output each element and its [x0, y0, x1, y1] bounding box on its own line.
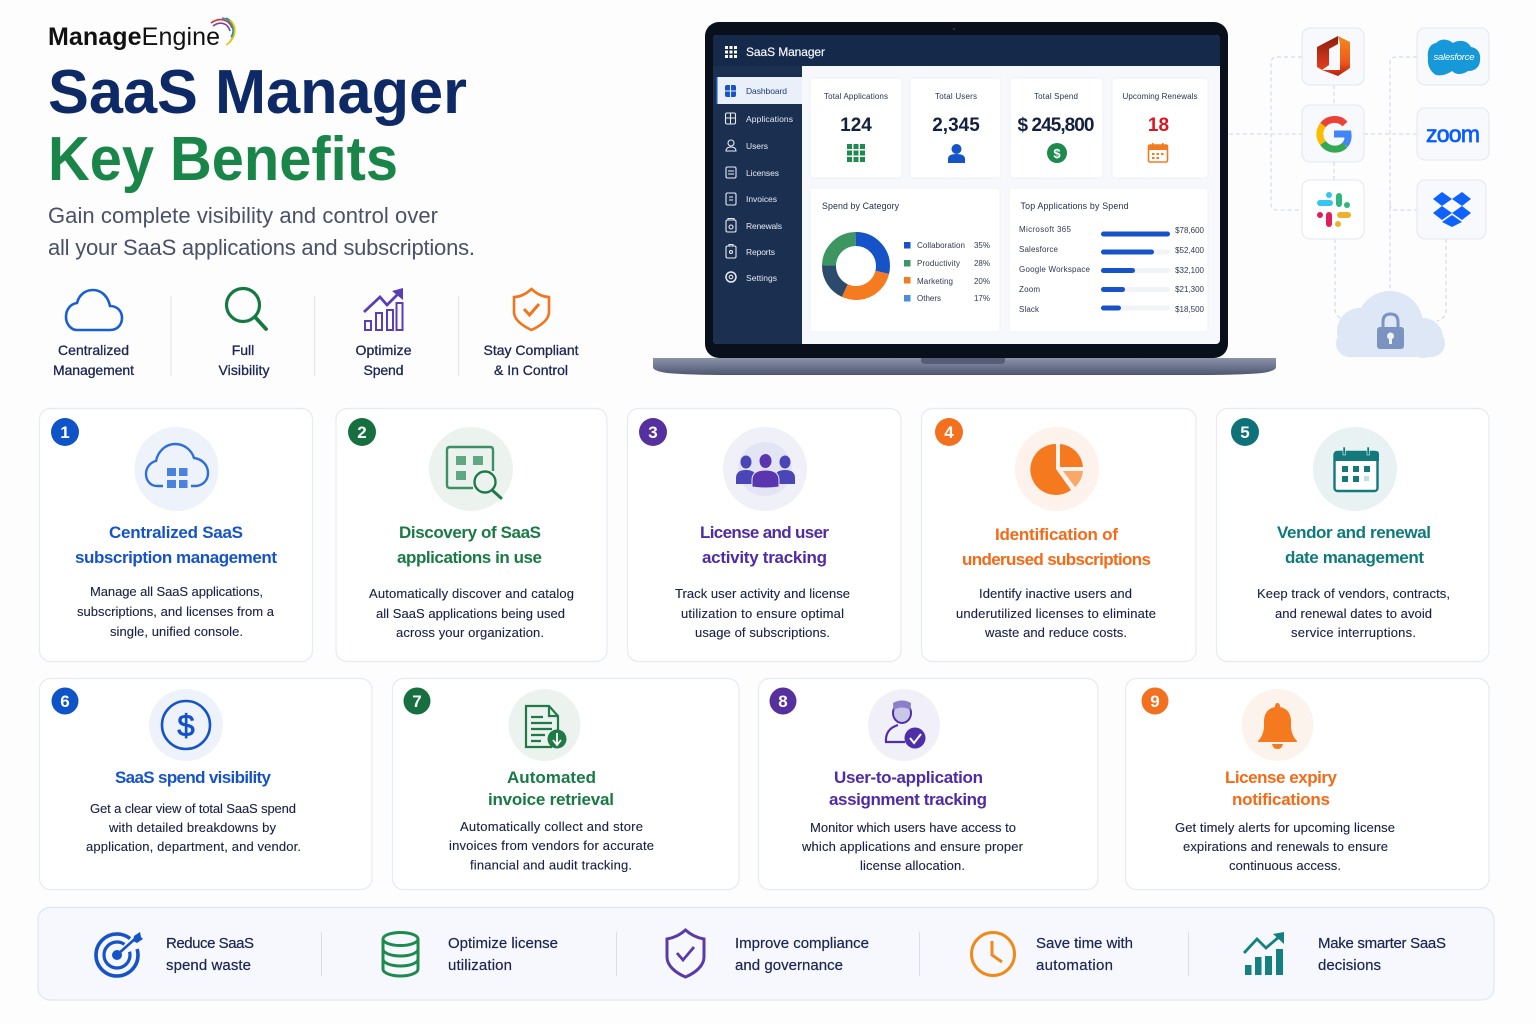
chart: Spend by Category donut: 20%	[974, 277, 990, 286]
KPI: Total Applications: Total Applications	[824, 92, 888, 101]
logo tile: Salesforce	[1417, 28, 1489, 85]
icon: app discovery	[429, 427, 513, 511]
label: Optimize Spend: Optimize	[356, 342, 412, 358]
heading	[397, 523, 542, 567]
heading: invoice retrieval	[488, 790, 614, 809]
sidebar: Applications	[746, 114, 793, 124]
KPI: Total Spend	[1010, 78, 1103, 178]
description	[449, 819, 654, 872]
KPI: Upcoming Renewals: Upcoming Renewals	[1122, 92, 1198, 101]
sidebar: Reports	[746, 247, 775, 257]
panel: card 9 expiry notifications	[1126, 678, 1489, 890]
text: reduce spend waste: Reduce SaaS	[166, 935, 254, 952]
heading	[488, 768, 614, 809]
description	[369, 586, 574, 640]
heading	[1277, 523, 1431, 567]
heading: assignment tracking	[829, 790, 987, 809]
badge 2: 2	[357, 423, 367, 442]
icon: document download	[508, 689, 580, 761]
KPI: Total Spend: Total Spend	[1034, 92, 1078, 101]
logo tile: Zoom	[1417, 108, 1489, 160]
sidebar: Renewals	[746, 221, 782, 231]
chart: Spend by Category donut: Others	[917, 294, 941, 303]
heading	[829, 768, 987, 809]
description: single, unified console.	[110, 624, 243, 639]
label: Optimize Spend: Spend	[364, 362, 404, 378]
KPI: Upcoming Renewals	[1112, 78, 1208, 178]
subtitle: Gain complete visibility and control over	[48, 203, 438, 228]
chart: Top Applications by Spend: $21,300	[1175, 285, 1205, 294]
description	[77, 584, 275, 639]
description	[675, 586, 850, 640]
chart: Spend by Category donut: Spend by Category	[822, 201, 900, 211]
badge 1: 1	[60, 423, 70, 442]
label: Full Visibility: Full	[232, 342, 254, 358]
heading: Discovery of SaaS	[399, 523, 541, 542]
app header: SaaS Manager	[746, 45, 825, 59]
feature row	[53, 288, 579, 378]
text: improve compliance governance: Improve compliance	[735, 935, 869, 952]
description: license allocation.	[860, 858, 965, 873]
logo tile: Google	[1302, 105, 1364, 162]
badge 1	[51, 418, 79, 446]
icon: pie chart	[1015, 427, 1099, 511]
description: invoices from vendors for accurate	[449, 838, 654, 853]
description	[801, 820, 1024, 873]
badge 8	[770, 688, 796, 714]
description: with detailed breakdowns by	[108, 820, 276, 835]
text: save time: automation	[1036, 957, 1113, 974]
text: smarter decisions: Make smarter SaaS	[1318, 935, 1446, 952]
description	[1257, 586, 1450, 640]
KPI: Total Users: Total Users	[935, 92, 977, 101]
icon: bell	[1242, 689, 1314, 761]
description: Monitor which users have access to	[810, 820, 1016, 835]
KPI: Total Users	[910, 78, 1001, 178]
laptop dashboard	[653, 22, 1276, 375]
icon: growth bars	[1244, 932, 1284, 975]
description: Manage all SaaS applications,	[90, 584, 263, 599]
label: Full Visibility: Visibility	[218, 362, 270, 378]
heading: activity tracking	[702, 548, 827, 567]
icon: dollar coin	[149, 689, 223, 761]
KPI: Total Applications: 124	[840, 115, 872, 136]
label: Centralized Management: Management	[53, 362, 134, 378]
icon: growth chart	[364, 288, 403, 330]
badge 3: 3	[648, 423, 658, 442]
sidebar: Invoices	[746, 194, 777, 204]
text: save time	[1036, 935, 1133, 974]
subtitle: all your SaaS applications and subscriptions.	[48, 235, 475, 260]
description: underutilized licenses to eliminate	[956, 606, 1156, 621]
panel: card 3 license tracking	[628, 408, 901, 662]
chart: Top Applications by Spend	[1009, 188, 1208, 332]
heading: User-to-application	[834, 768, 983, 787]
icon: users	[723, 427, 807, 511]
badge 6	[52, 688, 78, 714]
label: Centralized Management	[53, 342, 134, 378]
panel: card 1 centralized subscription management	[40, 408, 312, 662]
heading	[962, 525, 1151, 569]
badge 4	[935, 418, 963, 446]
badge 6: 6	[60, 692, 70, 711]
text: reduce spend waste	[166, 935, 254, 974]
icon: shield check	[667, 930, 704, 977]
title: SaaS Manager: SaaS Manager	[48, 58, 467, 127]
heading: applications in use	[397, 548, 542, 567]
chart: Top Applications by Spend: $18,500	[1175, 305, 1205, 314]
description: Identify inactive users and	[979, 586, 1132, 601]
label: Full Visibility	[218, 342, 270, 378]
logo tile: Salesforce: salesforce	[1434, 52, 1474, 63]
icon: magnifier	[226, 288, 266, 329]
text: optimize license utilization	[448, 935, 558, 974]
badge 4: 4	[944, 423, 954, 442]
chart: Spend by Category donut: 35%	[974, 241, 990, 250]
logo: ManageEngine: ManageEngine	[48, 23, 220, 51]
badge 7: 7	[412, 692, 422, 711]
chart: Spend by Category donut: 17%	[974, 294, 990, 303]
chart: Top Applications by Spend: Zoom	[1019, 285, 1040, 294]
description	[956, 586, 1156, 640]
text: improve compliance governance: and governance	[735, 957, 843, 974]
text: optimize license utilization: utilization	[448, 957, 512, 974]
heading: SaaS spend visibility	[115, 768, 272, 787]
sidebar: Dashboard	[746, 86, 787, 96]
label: Centralized Management: Centralized	[58, 342, 129, 358]
panel: card 2 discovery	[336, 408, 607, 662]
panel: card 5 vendor renewal	[1216, 408, 1489, 662]
text: smarter decisions	[1318, 935, 1446, 974]
badge 9: 9	[1150, 692, 1160, 711]
description: Automatically collect and store	[460, 819, 643, 834]
secure cloud with lock	[1336, 291, 1445, 358]
badge 3	[639, 418, 667, 446]
heading: Automated	[507, 768, 596, 787]
heading: underused subscriptions	[962, 550, 1151, 569]
integration network	[1229, 28, 1489, 358]
logo tile: Zoom: zoom	[1426, 121, 1480, 147]
chart: Top Applications by Spend: $78,600	[1175, 226, 1205, 235]
app header	[713, 35, 1220, 66]
panel: outcomes banner	[38, 908, 1494, 1000]
description: Get timely alerts for upcoming license	[1175, 820, 1395, 835]
logo tile: Dropbox	[1417, 180, 1486, 239]
laptop base	[653, 358, 1276, 375]
heading: Vendor and renewal	[1277, 523, 1431, 542]
description: utilization to ensure optimal	[681, 606, 844, 621]
badge 5: 5	[1240, 423, 1250, 442]
chart: Top Applications by Spend: Google Workspace	[1019, 265, 1091, 274]
description: usage of subscriptions.	[695, 625, 830, 640]
badge 8: 8	[778, 692, 788, 711]
icon: orange shield	[514, 289, 549, 330]
description	[1175, 820, 1395, 873]
heading: License expiry	[1225, 768, 1338, 787]
description: financial and audit tracking.	[470, 858, 632, 872]
description	[86, 801, 301, 854]
label: Stay Compliant & In Control	[484, 342, 579, 378]
KPI: Total Spend: $	[1053, 146, 1061, 161]
panel: card 7 invoice retrieval	[392, 678, 739, 890]
icon: cloud	[66, 290, 122, 330]
description: Track user activity and license	[675, 586, 850, 601]
chart: Spend by Category donut: Productivity	[917, 259, 960, 268]
text: improve compliance governance	[735, 935, 869, 974]
label: Optimize Spend	[356, 342, 412, 378]
badge 5	[1231, 418, 1259, 446]
sidebar: Licenses	[746, 168, 779, 178]
KPI: Total Users: 2,345	[932, 115, 980, 136]
text: reduce spend waste: spend waste	[166, 957, 251, 974]
heading	[75, 523, 277, 567]
description: service interruptions.	[1291, 625, 1416, 640]
sidebar: Users	[746, 141, 768, 151]
heading: License and user	[700, 523, 829, 542]
subtitle	[48, 203, 475, 260]
description: waste and reduce costs.	[984, 625, 1127, 640]
badge 9	[1142, 688, 1168, 714]
description: Keep track of vendors, contracts,	[1257, 586, 1450, 601]
icon: cloud apps	[134, 427, 218, 511]
text: save time: Save time with	[1036, 935, 1133, 952]
heading: subscription management	[75, 548, 277, 567]
chart: Spend by Category donut: Marketing	[917, 277, 953, 286]
badge 7	[404, 688, 430, 714]
KPI: Total Spend: $ 245,800	[1018, 115, 1094, 136]
heading: notifications	[1232, 790, 1330, 809]
description: Get a clear view of total SaaS spend	[90, 801, 296, 816]
chart: Top Applications by Spend: Top Applications by Spend	[1020, 201, 1129, 211]
label: Stay Compliant & In Control: & In Control	[494, 362, 568, 378]
text: optimize license utilization: Optimize license	[448, 935, 558, 952]
heading: date management	[1285, 548, 1424, 567]
description: across your organization.	[396, 625, 544, 640]
icon: user check	[868, 689, 940, 761]
description: continuous access.	[1229, 858, 1341, 873]
chart: Top Applications by Spend: Salesforce	[1019, 245, 1059, 254]
chart: Spend by Category donut	[810, 188, 1000, 332]
heading	[1225, 768, 1338, 809]
panel: card 8 assignment tracking	[758, 678, 1098, 890]
sidebar: Settings	[746, 273, 777, 283]
heading: Centralized SaaS	[109, 523, 243, 542]
icon: target	[96, 932, 143, 976]
panel: card 4 underused subscriptions	[922, 408, 1196, 662]
icon: database	[383, 932, 418, 976]
sidebar	[713, 66, 802, 344]
description: which applications and ensure proper	[801, 839, 1024, 854]
logo tile: Microsoft Office	[1302, 28, 1364, 85]
logo tile: Slack	[1302, 180, 1364, 239]
chart: Top Applications by Spend: $32,100	[1175, 266, 1205, 275]
icon: dollar coin: $	[177, 708, 195, 743]
icon: clock	[972, 932, 1014, 976]
label: Stay Compliant & In Control: Stay Compliant	[484, 342, 579, 358]
description: application, department, and vendor.	[86, 839, 301, 854]
panel: card 6 spend visibility	[40, 678, 372, 890]
chart: Spend by Category donut: Collaboration	[917, 241, 965, 250]
KPI: Total Applications	[810, 78, 902, 178]
icon: calendar	[1313, 427, 1397, 511]
chart: Top Applications by Spend: $52,400	[1175, 246, 1205, 255]
description: subscriptions, and licenses from a	[77, 604, 275, 619]
description: Automatically discover and catalog	[369, 586, 574, 601]
chart: Spend by Category donut: 28%	[974, 259, 990, 268]
heading	[700, 523, 829, 567]
description: and renewal dates to avoid	[1275, 606, 1432, 621]
description: all SaaS applications being used	[376, 606, 565, 621]
title: Key Benefits: Key Benefits	[48, 125, 398, 194]
chart: Top Applications by Spend: Slack	[1019, 305, 1040, 314]
KPI: Upcoming Renewals: 18	[1148, 115, 1169, 136]
text: smarter decisions: decisions	[1318, 957, 1381, 974]
description: expirations and renewals to ensure	[1183, 839, 1388, 854]
heading: Identification of	[995, 525, 1118, 544]
chart: Top Applications by Spend: Microsoft 365	[1019, 225, 1072, 234]
badge 2	[348, 418, 376, 446]
